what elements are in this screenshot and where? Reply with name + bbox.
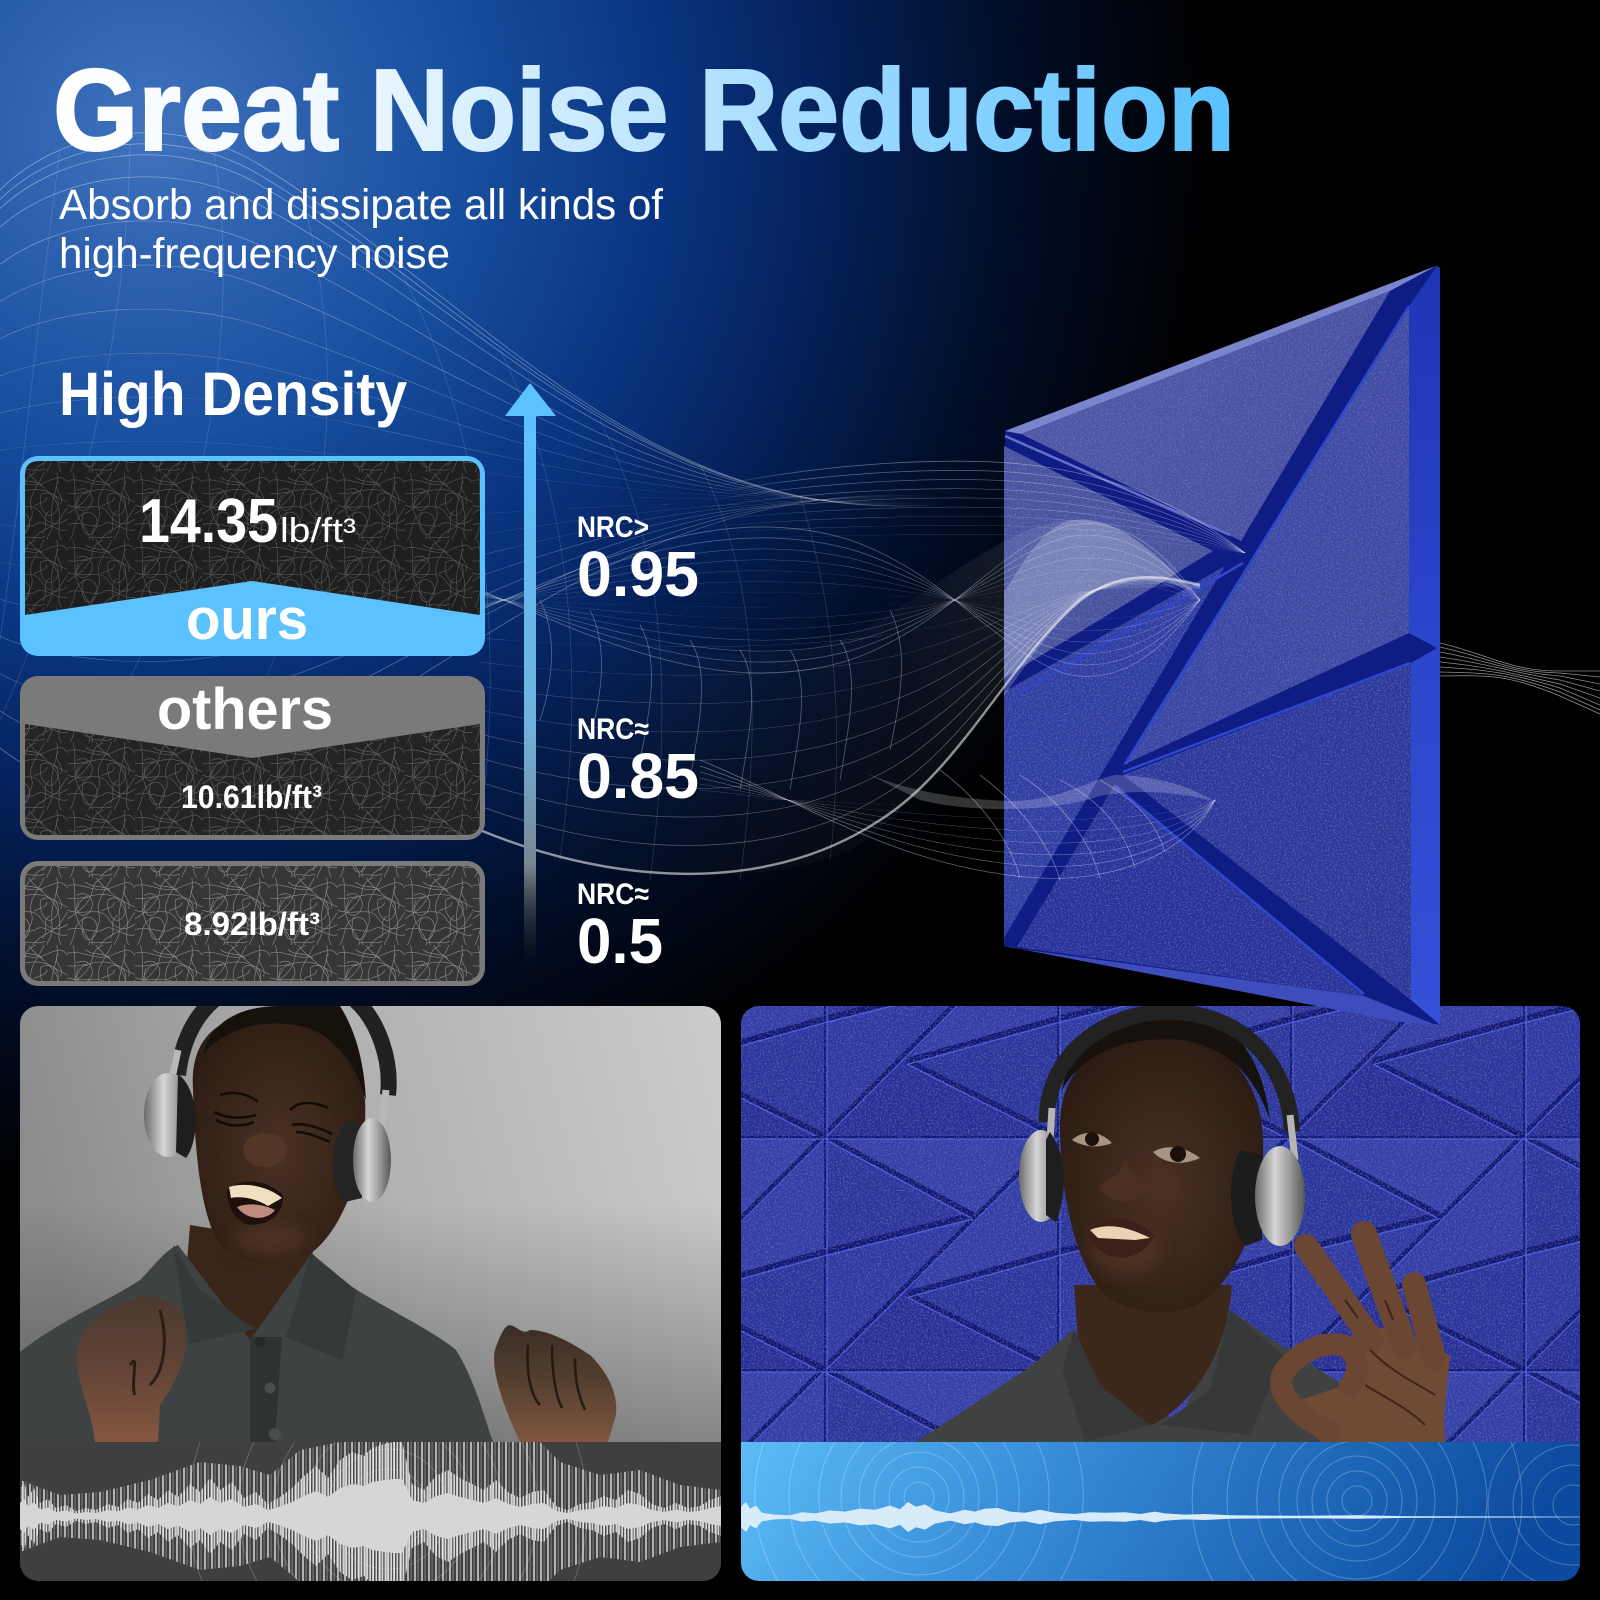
- face: nose: [243, 1133, 287, 1167]
- NRC value 0.85: NRC≈: [577, 713, 649, 746]
- NRC value 0.5: 0.5: [577, 905, 663, 977]
- wave: upper hump family: [0, 133, 940, 794]
- panel: left photo, man grimacing against grey wall: [20, 1000, 721, 1594]
- person: collar and buttons: [173, 1245, 357, 1442]
- wave: translucent surface: [480, 519, 1193, 875]
- headphones: [144, 1000, 391, 1202]
- value: 14.35: 14.35: [139, 487, 278, 556]
- panel: right photo, man smiling in front of acoustic panels: [741, 1006, 1600, 1590]
- wave: middle family: [480, 524, 1200, 790]
- blue waveform: reduced noise: [741, 1442, 1580, 1581]
- wave: right tail: [1440, 643, 1600, 714]
- NRC value 0.85: 0.85: [577, 740, 699, 812]
- sound wave mesh: [0, 130, 1600, 880]
- unit: lb/ft3: lb/ft³: [280, 512, 356, 550]
- value: 10.61lb/ft3: 10.61lb/ft³: [181, 779, 322, 815]
- acoustic panel wall: [741, 1006, 1580, 1442]
- subtitle: Absorb and dissipate all kinds of: [59, 181, 664, 229]
- panel: top bevel: [1005, 266, 1436, 434]
- person: left fist: [77, 1295, 186, 1442]
- face: mouth: [1090, 1218, 1155, 1258]
- panel: felt facets: [1004, 291, 1411, 1000]
- wave: lower family: [480, 577, 1200, 874]
- 3D acoustic panel: [1004, 266, 1440, 1025]
- arrow: density scale: [505, 383, 556, 980]
- panel: groove highlights: [1005, 306, 1410, 994]
- NRC value 0.5: NRC≈: [577, 878, 649, 911]
- panel: bottom bevel: [1004, 946, 1436, 1025]
- card: low density 8.92 lb/ft3: [20, 861, 485, 986]
- wave: lower bright band: [860, 770, 1213, 809]
- person: neck: [184, 1225, 315, 1343]
- label: ours: ours: [186, 587, 308, 652]
- headphones: [1019, 1012, 1305, 1246]
- face: eyes: [1072, 1132, 1200, 1163]
- wave: bright ribbon over panel: [1004, 519, 1193, 696]
- card: ours fibre texture: [25, 461, 480, 615]
- title: Great Noise Reduction: [53, 45, 1235, 175]
- NRC value 0.95: NRC>: [577, 511, 649, 544]
- person: face: [193, 1006, 366, 1264]
- person: face: [1060, 1008, 1270, 1312]
- subtitle: [59, 181, 664, 278]
- grey waveform: loud noise: [20, 1442, 721, 1581]
- panel: right side strip: [1409, 266, 1440, 1025]
- subtitle: high-frequency noise: [59, 230, 450, 278]
- card: fibre texture: [25, 866, 480, 981]
- wave: bowl family: [700, 760, 1215, 880]
- NRC value 0.95: 0.95: [577, 538, 699, 610]
- person: collar: [1062, 1310, 1283, 1442]
- card: ours 14.35 lb/ft3: [20, 456, 485, 656]
- face: open mouth with teeth: [227, 1182, 283, 1225]
- grey wall: [20, 1006, 721, 1442]
- person: shirt: [916, 1310, 1346, 1442]
- wave: top band: [700, 461, 1245, 553]
- heading: High Density: High Density: [59, 360, 407, 428]
- wave: hump cross lines: [0, 130, 837, 880]
- panel: base and grooves: [1004, 266, 1440, 1025]
- person: hand OK sign: [1281, 1234, 1450, 1442]
- person: right fist: [494, 1325, 616, 1442]
- person: shirt: [20, 1245, 493, 1442]
- face: nose: [1099, 1161, 1132, 1201]
- card: others fibre texture: [25, 724, 480, 835]
- card: others 10.61 lb/ft3: [20, 676, 485, 840]
- person: neck: [1074, 1285, 1232, 1425]
- value: 8.92lb/ft3: 8.92lb/ft³: [184, 906, 320, 942]
- face: eyes squeezed shut: [214, 1093, 332, 1142]
- label: others: others: [157, 677, 333, 742]
